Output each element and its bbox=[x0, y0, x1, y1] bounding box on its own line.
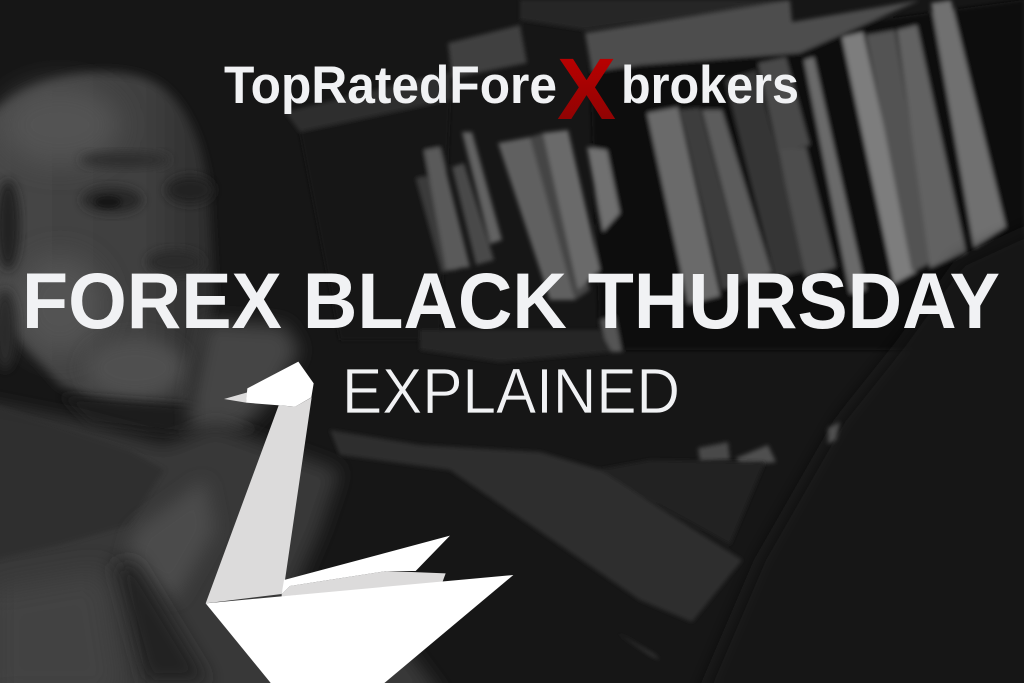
logo bbox=[224, 41, 799, 138]
swan neck bbox=[206, 397, 312, 603]
logo: TopRatedFore: TopRatedFore bbox=[224, 56, 557, 115]
collar shadow bbox=[60, 395, 260, 435]
logo: brokers: brokers bbox=[621, 56, 799, 115]
swan body bbox=[206, 575, 513, 683]
swan lower wing bbox=[282, 571, 446, 597]
subtitle: EXPLAINED bbox=[342, 355, 680, 427]
bookshelf bbox=[285, 0, 1024, 362]
jacket bbox=[0, 402, 445, 683]
title: FOREX BLACK THURSDAY bbox=[22, 256, 1000, 345]
swan upper wing bbox=[282, 536, 450, 594]
head and face bbox=[0, 72, 215, 412]
swan head bbox=[246, 362, 314, 407]
right dark arm bbox=[700, 225, 1024, 683]
objects behind the arm bbox=[698, 422, 840, 466]
sleeve with woven texture bbox=[330, 430, 765, 622]
hand at chin bbox=[190, 320, 300, 430]
swan beak bbox=[224, 392, 247, 403]
icon: origami swan bbox=[206, 362, 513, 683]
logo: red X: X bbox=[557, 41, 616, 138]
